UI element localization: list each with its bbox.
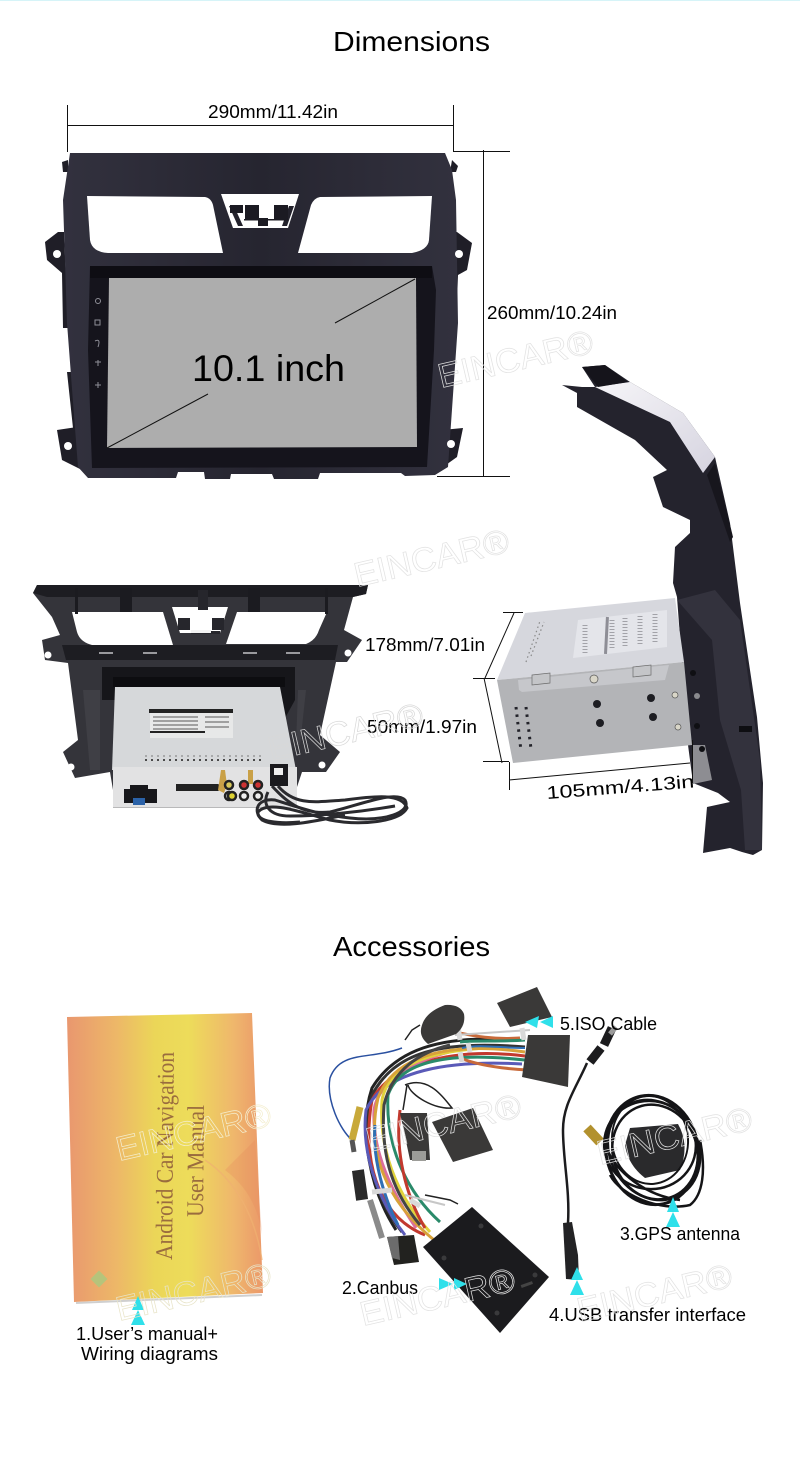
accessory 1: user manual [67, 1013, 263, 1303]
watermarks: EINCAR® [434, 323, 597, 396]
side view of chassis box [497, 598, 692, 763]
chassis dimension lines [473, 612, 692, 790]
vent holes [145, 759, 262, 761]
front view of head unit panel [45, 153, 472, 479]
watermarks: EINCAR® [112, 1096, 275, 1169]
watermarks: EINCAR® [356, 1261, 519, 1334]
watermarks: EINCAR® [350, 522, 513, 595]
connectors [124, 789, 157, 803]
height dimension [437, 150, 617, 476]
width dimension: 290mm/11.42in [208, 102, 338, 122]
accessory labels [342, 1014, 746, 1325]
accessory 4: USB transfer cable [563, 1027, 616, 1280]
screen bezel [88, 266, 436, 468]
side buttons [95, 298, 101, 388]
manual cover title: User Manual [183, 1105, 210, 1217]
watermarks: EINCAR® [593, 1100, 756, 1173]
vent dots [526, 621, 544, 662]
watermarks: EINCAR® [264, 696, 427, 769]
depth dimension labels [365, 635, 695, 803]
height dimension: 260mm/10.24in [487, 303, 617, 323]
watermarks: EINCAR® [573, 1257, 736, 1330]
metal chassis [112, 687, 296, 770]
watermarks: EINCAR® [362, 1087, 525, 1160]
top accent line [0, 0, 800, 1]
manual cover title [152, 1052, 210, 1260]
label: user's manual: Wiring diagrams [81, 1344, 218, 1364]
accessory 3: GPS antenna [587, 1083, 718, 1217]
accessory labels: 2.Canbus [342, 1278, 418, 1298]
wire ties [372, 1026, 524, 1206]
width dimension [68, 102, 510, 152]
chassis label [149, 709, 233, 713]
foam blocks [400, 987, 570, 1162]
heading: Accessories: Accessories [333, 931, 490, 962]
depth dimension labels: 178mm/7.01in [365, 635, 485, 655]
label: user's manual [76, 1324, 218, 1364]
accessory 2 and 5: ISO cable harness with canbus [329, 987, 570, 1333]
accessory labels: 3.GPS antenna [620, 1224, 741, 1244]
coiled cable [257, 786, 407, 824]
heading: Dimensions: Dimensions [333, 26, 490, 57]
wires [329, 1025, 530, 1240]
accessory labels: 5.ISO Cable [560, 1014, 657, 1034]
side view of panel [562, 365, 763, 855]
label: user's manual: 1.User’s manual+ [76, 1324, 218, 1344]
screen diagonal [107, 279, 415, 448]
depth dimension labels: 105mm/4.13in [546, 771, 695, 803]
accessory labels: 4.USB transfer interface [549, 1305, 746, 1325]
depth dimension labels: 50mm/1.97in [367, 717, 477, 737]
watermarks: EINCAR® [112, 1256, 275, 1329]
watermarks [112, 323, 756, 1334]
arrow: manual pointer [131, 1296, 145, 1325]
pointer arrows [439, 1016, 680, 1295]
size label: 10.1 inch: 10.1 inch [192, 348, 345, 389]
canbus box [423, 1207, 549, 1333]
mounting holes [53, 250, 463, 450]
manual cover title: Android Car Navigation [152, 1052, 180, 1260]
screen [107, 278, 417, 448]
rear view of head unit [33, 585, 407, 824]
RCA and antenna plugs [352, 1107, 360, 1140]
side label [573, 610, 667, 658]
